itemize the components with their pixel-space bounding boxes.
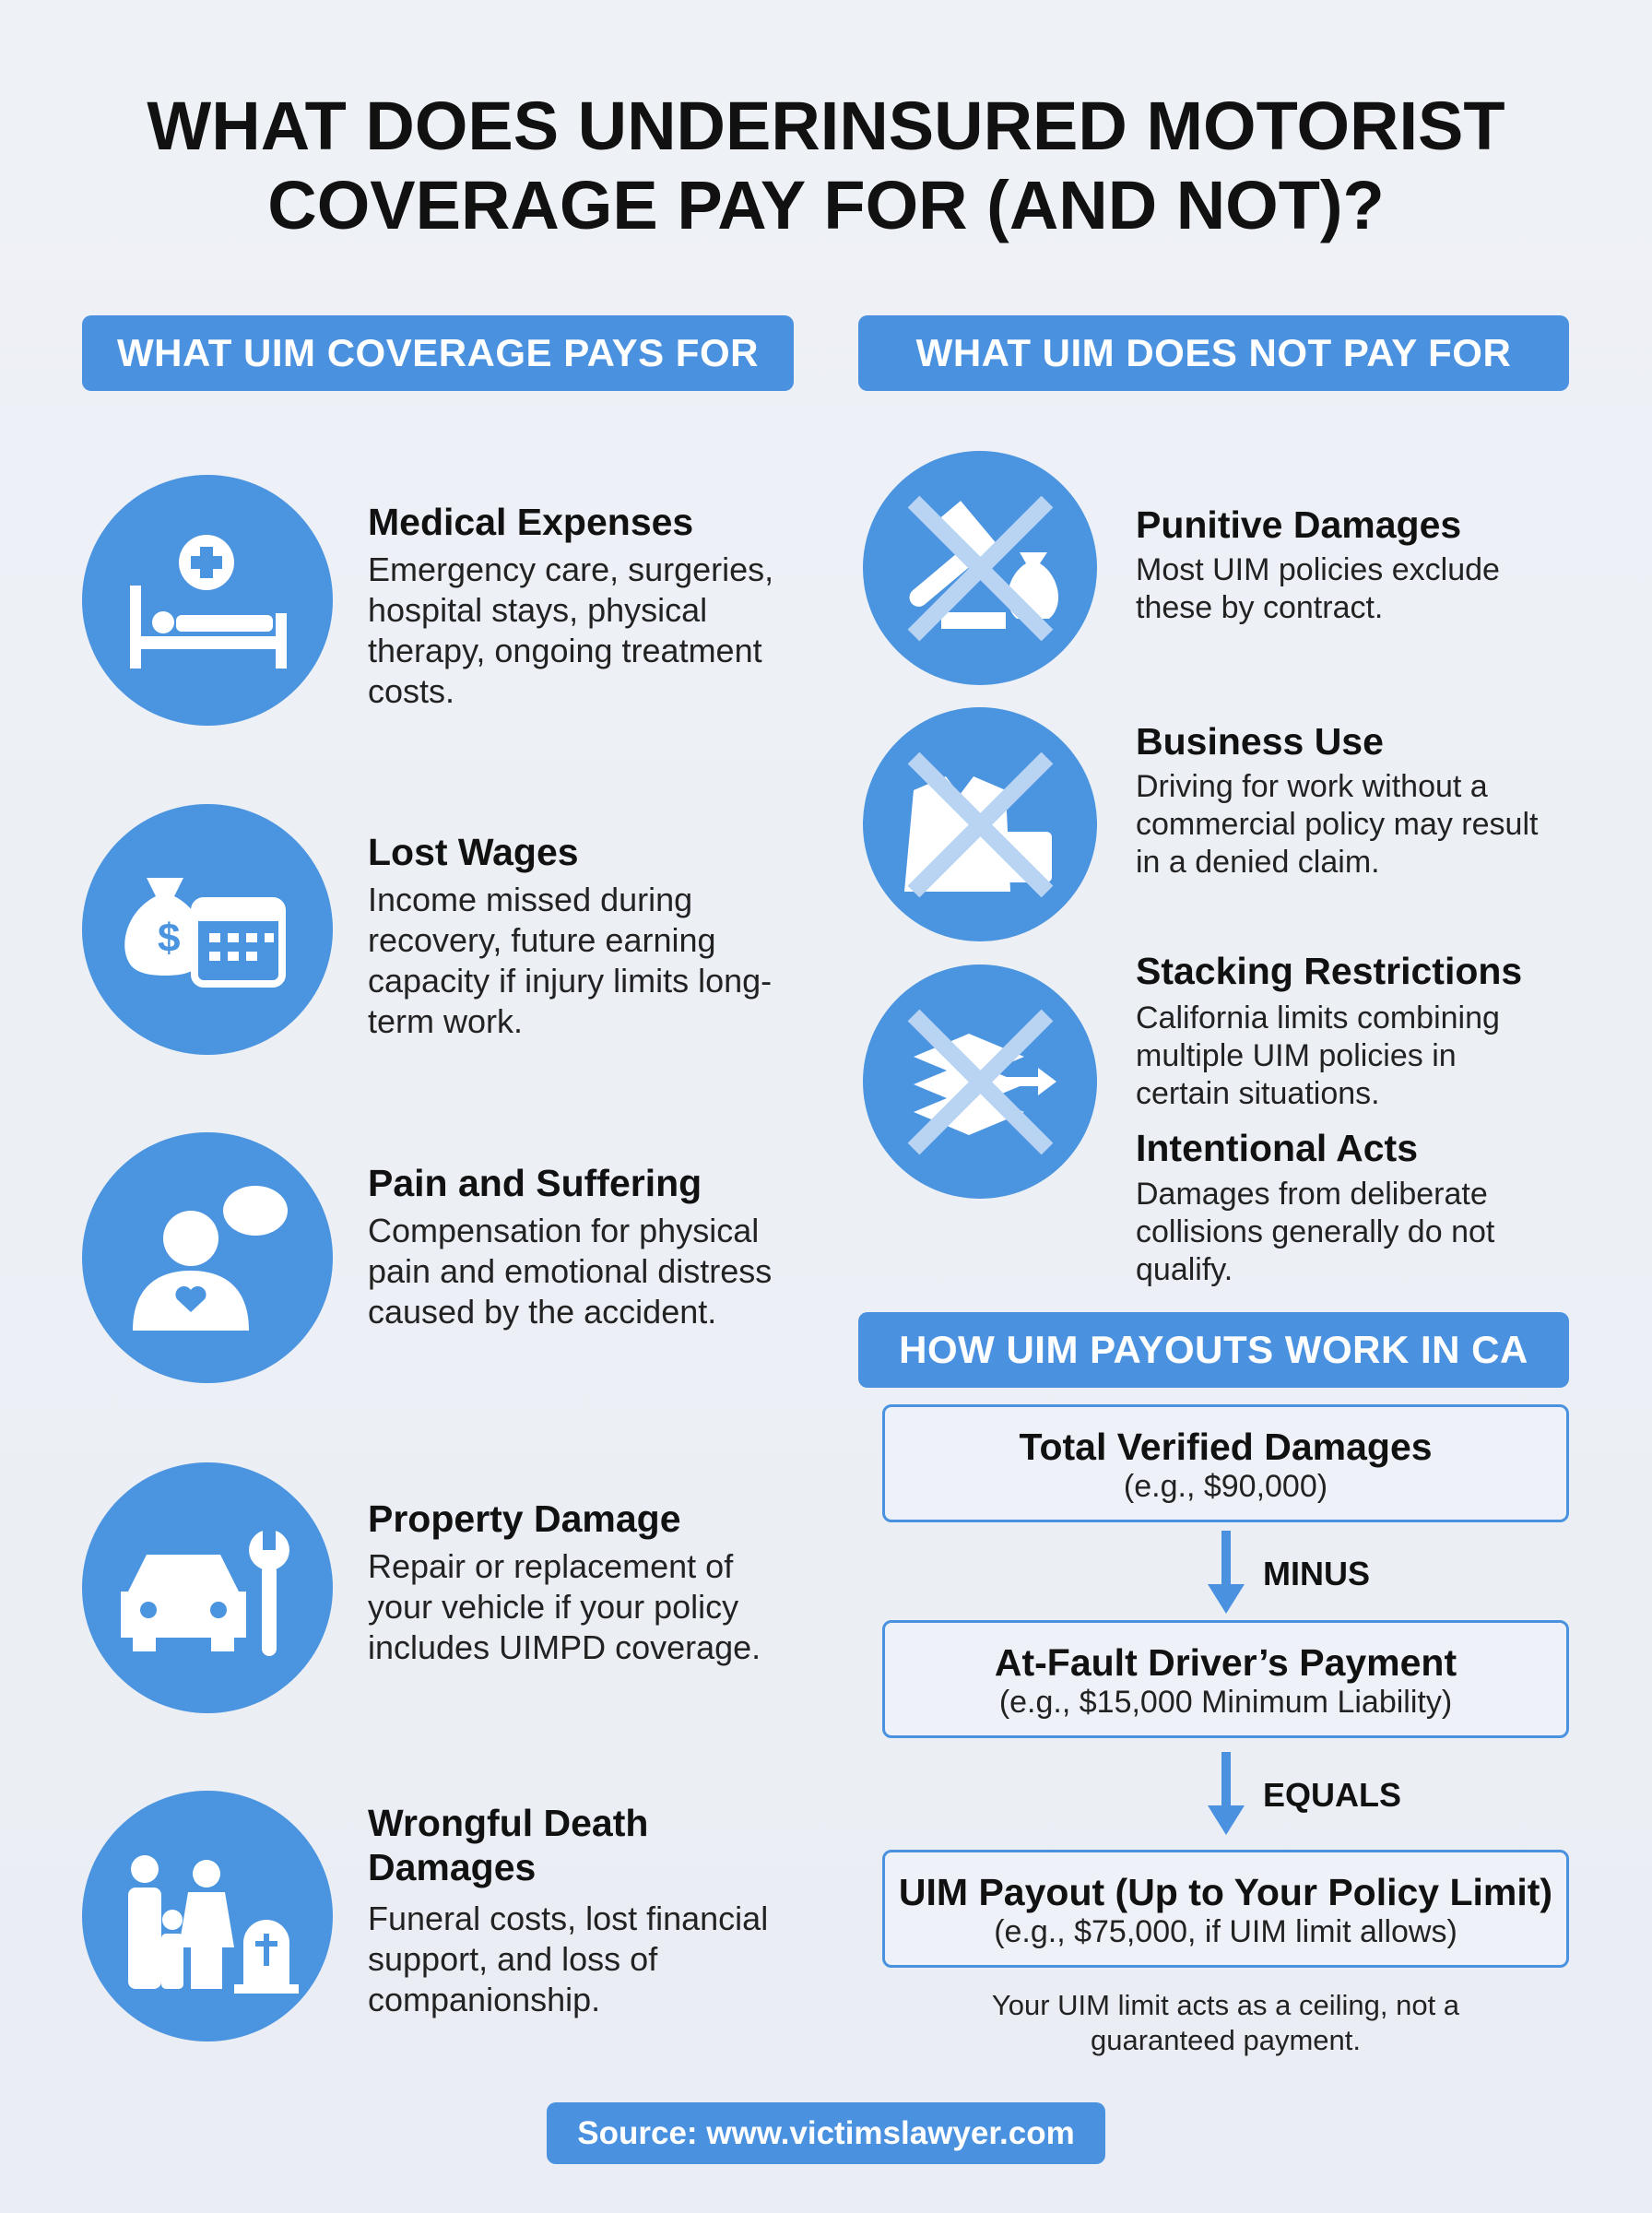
box: total damages: (e.g., $90,000) [1124, 1469, 1328, 1504]
box: at-fault payment: At-Fault Driver’s Payment [995, 1641, 1457, 1684]
text: wrongful death: Wrongful Death [368, 1802, 648, 1844]
text: Driving for work without a [1136, 769, 1488, 804]
text: California limits combining [1136, 1000, 1500, 1035]
text: wrongful death [368, 1802, 648, 1888]
text: intentional: Intentional Acts [1136, 1127, 1418, 1169]
text: stacking: Stacking Restrictions [1136, 950, 1522, 992]
icon: money calendar [82, 804, 333, 1055]
text: hospital stays, physical [368, 591, 707, 629]
text: Funeral costs, lost financial [368, 1899, 768, 1937]
note: guaranteed payment. [1091, 2024, 1361, 2056]
icon: pain person brain [82, 1132, 333, 1383]
icon: money calendar: $ [158, 916, 180, 961]
box: at-fault payment: (e.g., $15,000 Minimum Liability) [999, 1685, 1452, 1720]
text: therapy, ongoing treatment [368, 632, 762, 669]
header: how payouts work: HOW UIM PAYOUTS WORK IN CA [899, 1328, 1528, 1371]
text: your vehicle if your policy [368, 1588, 738, 1626]
text: includes UIMPD coverage. [368, 1628, 761, 1666]
box: uim payout [882, 1850, 1569, 1968]
text: Emergency care, surgeries, [368, 550, 773, 588]
header: does not pay [858, 315, 1569, 391]
title [147, 88, 1505, 243]
header: how payouts work [858, 1312, 1569, 1388]
header: does not pay: WHAT UIM DOES NOT PAY FOR [916, 331, 1511, 374]
text: pain: Pain and Suffering [368, 1162, 702, 1204]
text: commercial policy may result [1136, 807, 1538, 842]
icon: stack crossed [863, 964, 1097, 1199]
text: Most UIM policies exclude [1136, 552, 1500, 587]
note: Your UIM limit acts as a ceiling, not a [992, 1989, 1459, 2021]
text: punitive: Punitive Damages [1136, 503, 1461, 546]
text: business: Business Use [1136, 720, 1384, 763]
arrow: minus [1208, 1531, 1370, 1614]
header: pays for [82, 315, 794, 391]
text: qualify. [1136, 1252, 1233, 1287]
box: total damages [882, 1404, 1569, 1522]
note [992, 1989, 1459, 2056]
title: COVERAGE PAY FOR (AND NOT)? [267, 167, 1385, 243]
text: Compensation for physical [368, 1212, 759, 1249]
icon: family grave [82, 1791, 333, 2041]
arrow: minus: MINUS [1263, 1555, 1370, 1592]
text: lost wages: Lost Wages [368, 831, 579, 873]
text: collisions generally do not [1136, 1214, 1494, 1249]
icon: business crossed [863, 707, 1097, 941]
text: term work. [368, 1002, 523, 1040]
box: uim payout: (e.g., $75,000, if UIM limit allows) [994, 1914, 1457, 1949]
header: pays for: WHAT UIM COVERAGE PAYS FOR [117, 331, 759, 374]
arrow: equals: EQUALS [1263, 1776, 1401, 1814]
text: property: Property Damage [368, 1497, 681, 1540]
icon: car wrench [82, 1462, 333, 1713]
box: at-fault payment [882, 1620, 1569, 1738]
icon: gavel crossed [863, 451, 1097, 685]
box: uim payout: UIM Payout (Up to Your Policy Limit) [899, 1871, 1552, 1913]
text: support, and loss of [368, 1940, 657, 1978]
text: Repair or replacement of [368, 1547, 733, 1585]
text: Damages from deliberate [1136, 1177, 1488, 1212]
text: capacity if injury limits long- [368, 962, 772, 1000]
source badge: Source: www.victimslawyer.com [577, 2115, 1075, 2151]
text: costs. [368, 672, 454, 710]
icon: medical bed [82, 475, 333, 726]
text: Income missed during [368, 881, 692, 918]
text: these by contract. [1136, 590, 1383, 625]
text: certain situations. [1136, 1076, 1380, 1111]
text: companionship. [368, 1981, 600, 2018]
text: in a denied claim. [1136, 845, 1380, 880]
text: caused by the accident. [368, 1293, 716, 1331]
arrow: equals [1208, 1752, 1401, 1835]
text: pain and emotional distress [368, 1252, 772, 1290]
text: wrongful death: Damages [368, 1846, 536, 1888]
title: WHAT DOES UNDERINSURED MOTORIST [147, 88, 1505, 164]
text: recovery, future earning [368, 921, 716, 959]
text: multiple UIM policies in [1136, 1038, 1457, 1073]
box: total damages: Total Verified Damages [1019, 1426, 1433, 1468]
source badge [547, 2102, 1105, 2164]
text: medical: Medical Expenses [368, 501, 693, 543]
